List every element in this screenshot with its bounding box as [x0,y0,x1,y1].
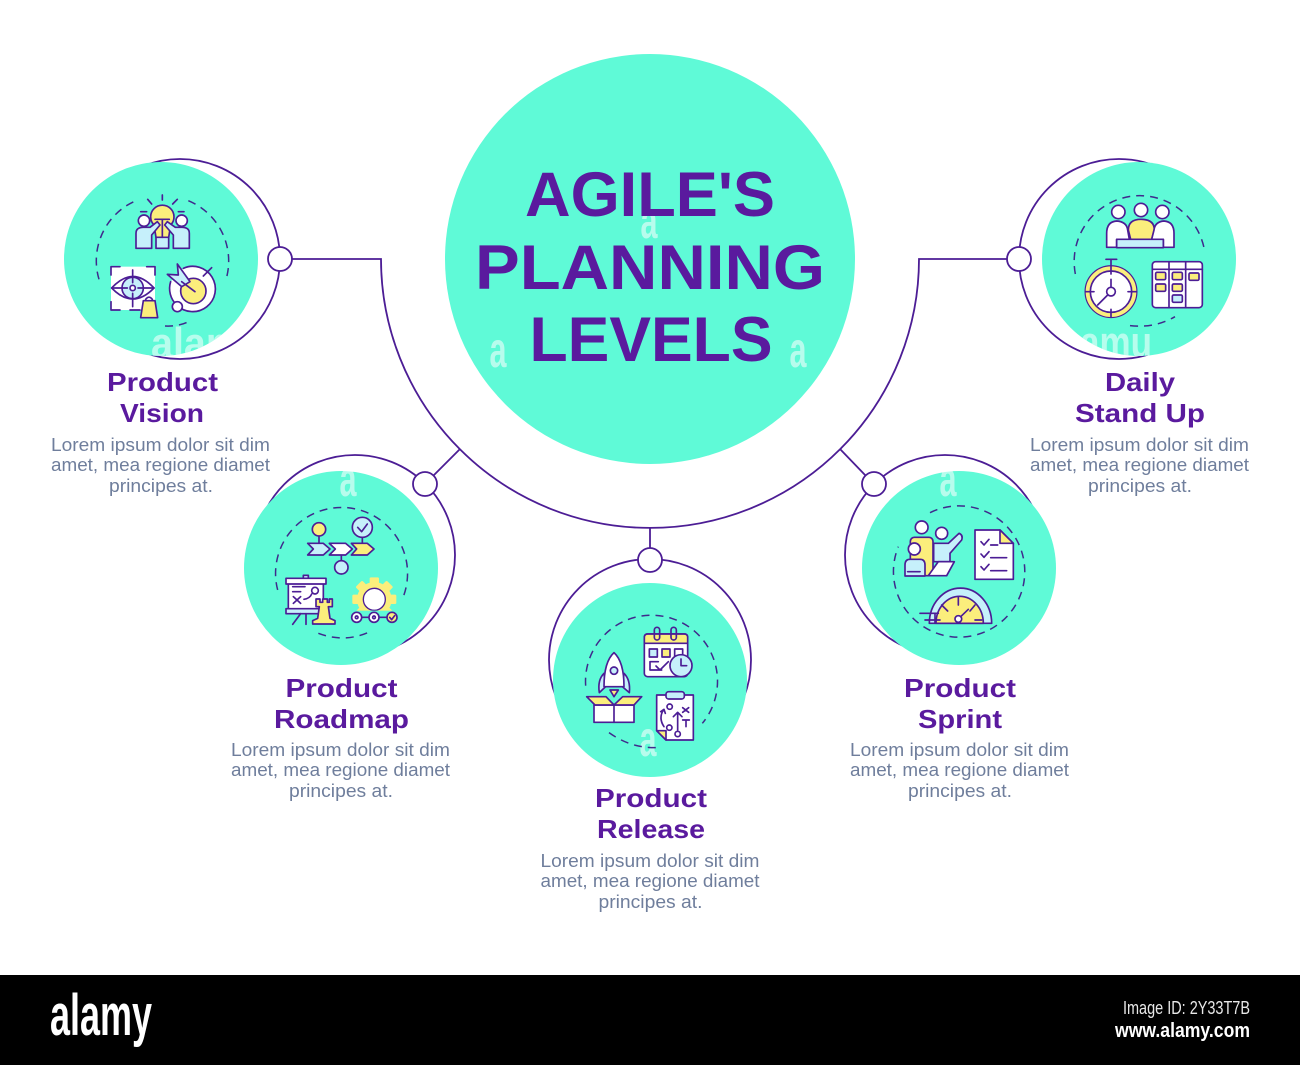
step: product vision [51,159,292,496]
footer bar: Image ID: 2Y33T7B [1123,998,1250,1018]
description: amet, mea regione diamet [850,760,1069,780]
step: product release: a [640,711,657,767]
description: principes at. [109,476,213,496]
step: product roadmap: a [340,451,357,507]
alamy logo: alamy [50,983,152,1048]
description: principes at. [289,781,393,801]
title [475,160,825,375]
heading: Product [286,673,398,703]
description [540,851,760,912]
footer bar: www.alamy.com [1114,1020,1250,1042]
heading: Product [595,783,707,813]
central circle with title: a [640,193,658,249]
description: principes at. [598,892,702,912]
icon: roadmap [276,507,408,638]
heading [107,367,218,428]
heading [274,673,409,734]
icon: vision [96,195,229,326]
description: amet, mea regione diamet [540,871,760,891]
central circle with title [445,54,855,464]
description [1030,435,1249,496]
heading [595,783,707,844]
description: amet, mea regione diamet [51,455,270,475]
step: product sprint: a [940,451,957,507]
icon: sprint [893,506,1025,637]
description: amet, mea regione diamet [1030,455,1249,475]
icon: release [586,615,718,748]
description: amet, mea regione diamet [231,760,450,780]
step: daily stand up: amu [1080,318,1152,367]
description: Lorem ipsum dolor sit dim [231,740,450,760]
description: Lorem ipsum dolor sit dim [1030,435,1249,455]
connector lines [292,259,1031,548]
title: AGILE'S [525,160,775,230]
step: daily stand up [1007,159,1249,496]
step: product roadmap [231,451,455,801]
description [850,740,1069,801]
description: Lorem ipsum dolor sit dim [51,435,270,455]
heading [904,673,1016,734]
description: Lorem ipsum dolor sit dim [540,851,760,871]
heading: Product [107,367,218,397]
heading: Roadmap [274,704,409,734]
title: LEVELS [530,305,772,375]
title: PLANNING [475,233,825,303]
footer bar [0,975,1300,1065]
description [231,740,450,801]
description: principes at. [1088,476,1192,496]
central circle with title: a [790,322,807,378]
heading: Stand Up [1075,398,1205,428]
heading [1075,367,1205,428]
step: product sprint [845,451,1069,801]
step: product vision: alam [151,319,241,368]
description [51,435,270,496]
heading: Sprint [918,704,1002,734]
heading: Daily [1105,367,1176,397]
step: product release [540,548,760,912]
heading: Vision [120,398,204,428]
description: Lorem ipsum dolor sit dim [850,740,1069,760]
icon: stand up [1074,196,1204,326]
heading: Release [597,814,705,844]
description: principes at. [908,781,1012,801]
central circle with title: a [490,322,507,378]
heading: Product [904,673,1016,703]
